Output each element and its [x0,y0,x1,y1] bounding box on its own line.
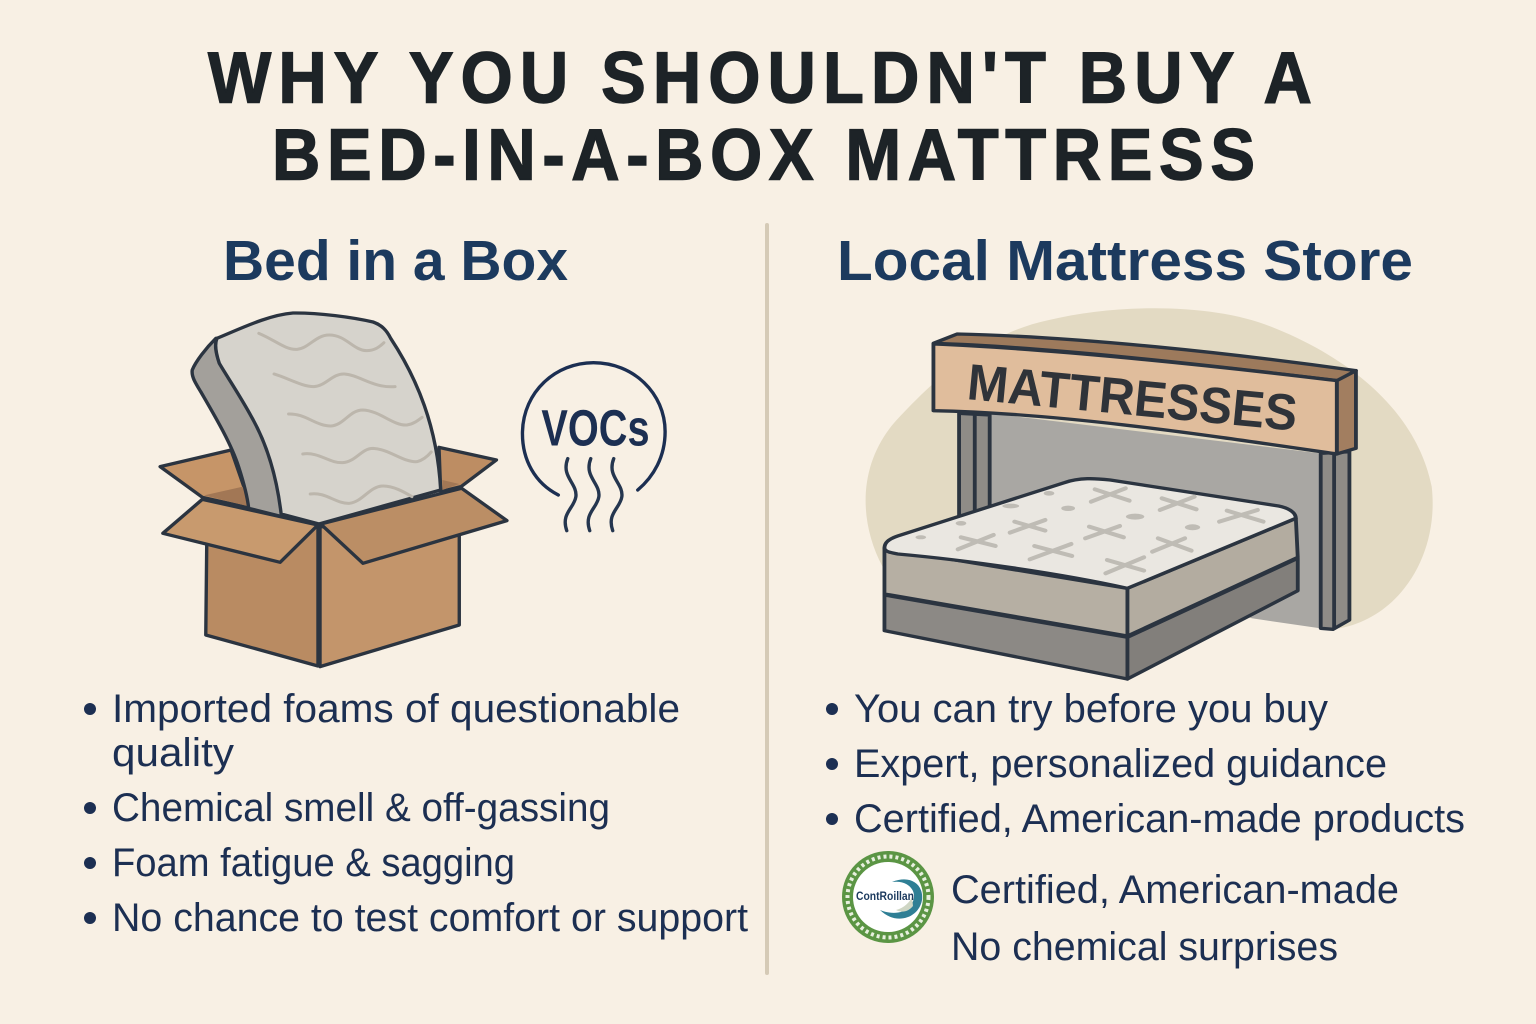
icon: certification badge [842,851,934,943]
icon: mattress store display: MATTRESSES [965,353,1300,442]
title: BED-IN-A-BOX MATTRESS [272,114,1255,195]
bullet list: local store benefits: Expert, personalized guidance [854,742,1387,786]
bullet list: local store benefits: Certified, American-made products [854,797,1465,841]
icon: VOCs emissions: VOCs [541,400,650,456]
callout: certification text [951,868,1399,969]
bullet list: bed in a box drawbacks [84,687,748,940]
bullet list: local store benefits [826,687,1465,841]
icon: mattress in cardboard box [160,313,507,667]
bullet list: bed in a box drawbacks: Chemical smell & off-gassing [112,786,610,830]
icon: mattress store display [866,308,1433,679]
icon: VOCs emissions [522,363,665,531]
callout: certification text: No chemical surprises [951,925,1338,969]
title [208,37,1312,195]
bullet list: local store benefits: You can try before you buy [854,687,1328,731]
icon: certification badge: ContRoillan [856,889,914,903]
heading: local mattress store: Local Mattress Store [837,229,1413,293]
heading: bed in a box: Bed in a Box [223,229,568,293]
panel: bed in a box [84,229,748,940]
callout: certification text: Certified, American-made [951,868,1399,912]
panel: local mattress store [826,229,1465,969]
bullet list: bed in a box drawbacks: quality [112,731,234,775]
bullet list: bed in a box drawbacks: No chance to test comfort or support [112,896,748,940]
bullet list: bed in a box drawbacks: Imported foams of questionable [112,687,680,731]
title: WHY YOU SHOULDN'T BUY A [208,37,1312,118]
bullet list: bed in a box drawbacks: Foam fatigue & sagging [112,841,515,885]
